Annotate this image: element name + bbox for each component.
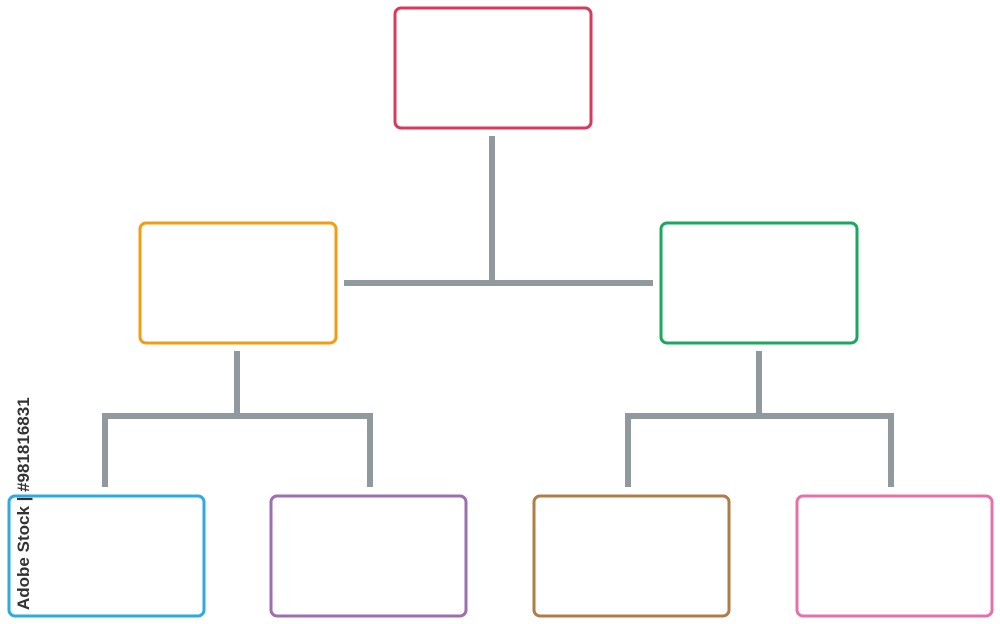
connector lines xyxy=(105,136,891,487)
box: purple xyxy=(271,496,466,616)
box: pink xyxy=(797,496,992,616)
box: green xyxy=(661,223,857,343)
box: top red xyxy=(395,8,591,128)
box: brown xyxy=(534,496,729,616)
box: orange xyxy=(140,223,336,343)
box: blue xyxy=(9,496,204,616)
watermark text: Adobe Stock | #981816831 xyxy=(14,397,33,610)
